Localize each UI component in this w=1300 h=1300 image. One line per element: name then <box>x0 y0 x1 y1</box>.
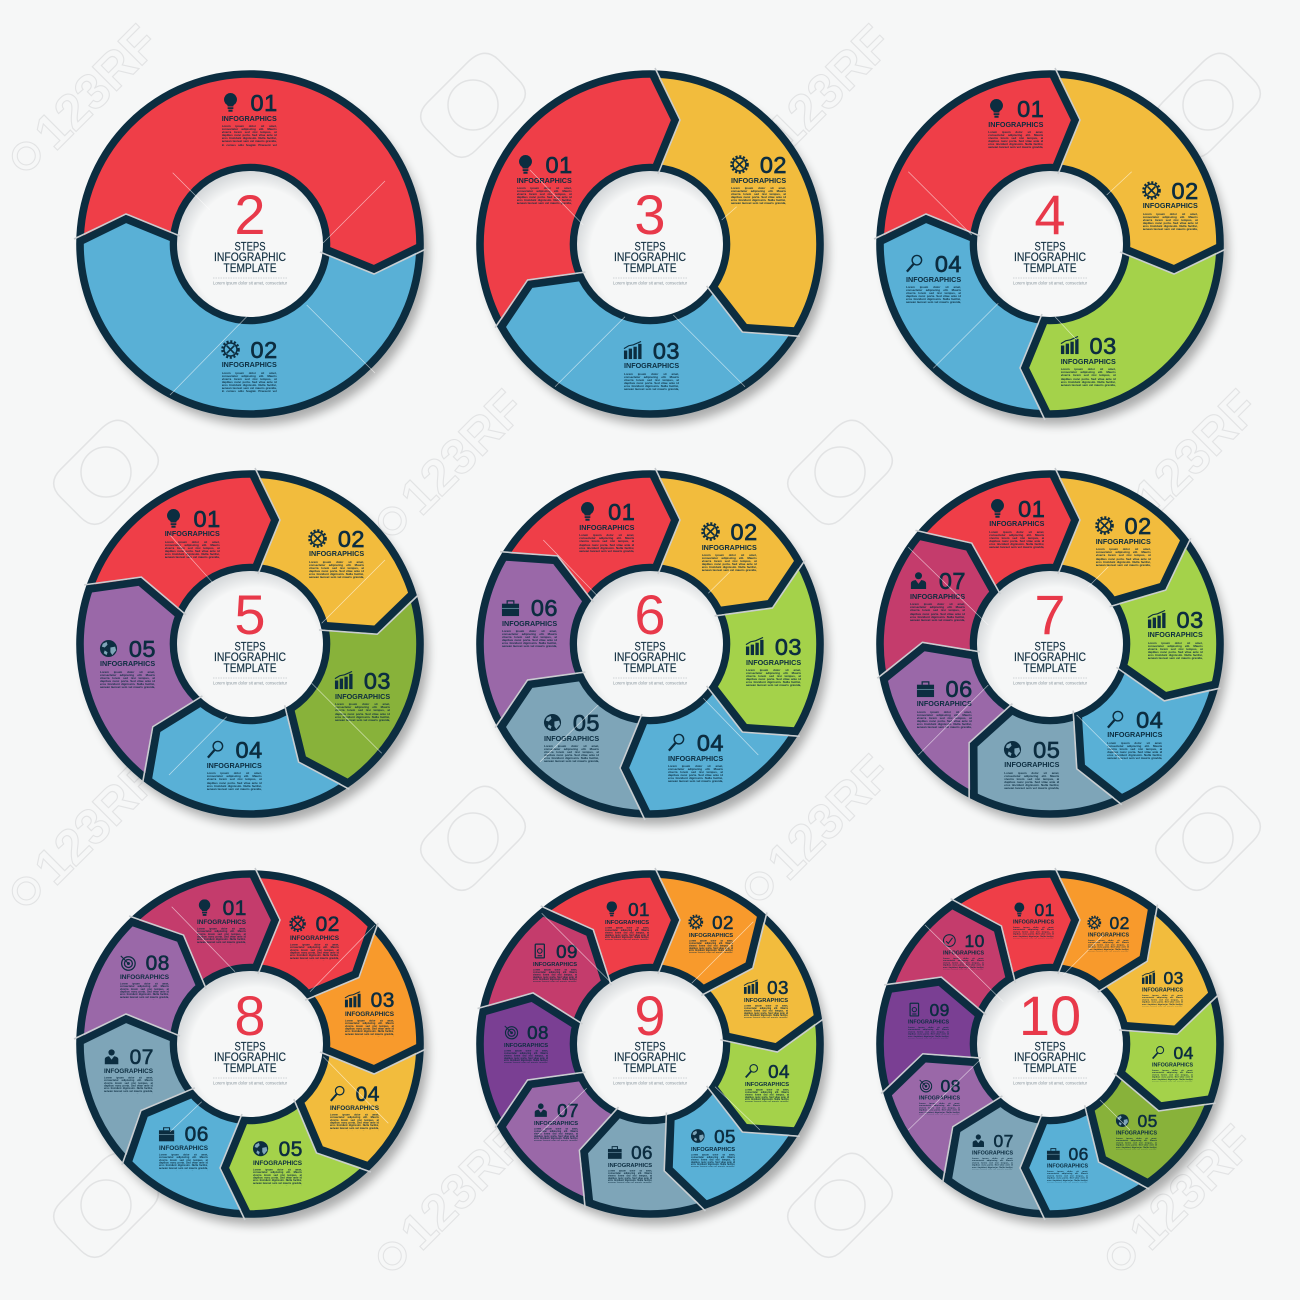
step 01 label: INFOGRAPHICS <box>988 120 1043 128</box>
step 03 label: 03 <box>653 338 680 364</box>
step 08 label: 08 <box>527 1022 549 1042</box>
step 04 label: 04 <box>1136 707 1163 733</box>
center label: TEMPLATE <box>1024 260 1077 274</box>
step 02 label: 02 <box>316 912 340 935</box>
step 10 label <box>943 935 984 974</box>
step 08 label: INFOGRAPHICS <box>120 972 169 980</box>
segment 04 <box>1104 970 1242 1120</box>
step 03 label: 03 <box>1177 607 1204 633</box>
segment 05 <box>38 567 230 788</box>
segment 01 <box>480 73 674 328</box>
segment 02 <box>606 844 778 1013</box>
center label <box>1013 182 1088 285</box>
step 01 label <box>989 496 1045 549</box>
step 04 label: INFOGRAPHICS <box>906 274 961 284</box>
step 03 label <box>334 668 391 722</box>
center label: STEPS <box>1034 1040 1066 1054</box>
segment 06 <box>568 1094 730 1241</box>
step 06 label: 06 <box>185 1122 209 1145</box>
step 08 label <box>919 1080 960 1119</box>
segment 02 <box>79 218 420 413</box>
step 02 label: 02 <box>731 519 758 545</box>
center label: STEPS <box>234 639 265 653</box>
step 01 label <box>222 90 278 147</box>
center label: 3 <box>634 182 665 246</box>
step 01 label: 01 <box>251 90 278 116</box>
step 05 label <box>544 710 600 764</box>
center label: Lorem ipsum dolor sit amet, consectetur <box>1013 680 1088 685</box>
step 01 label: INFOGRAPHICS <box>197 917 246 925</box>
step 07 label: 07 <box>557 1100 578 1121</box>
step 04 label: 04 <box>768 1061 789 1082</box>
segment 03 <box>1025 244 1220 414</box>
step 03 label <box>344 989 395 1037</box>
step 04 label <box>668 730 724 784</box>
step 02 label: INFOGRAPHICS <box>1143 201 1198 210</box>
step 07 label <box>104 1050 153 1096</box>
step 03 label <box>1142 972 1183 1010</box>
segment 04 <box>1050 633 1243 808</box>
center label <box>612 582 687 685</box>
segment 01 <box>880 73 1075 242</box>
step 03 label: 03 <box>1090 333 1117 359</box>
center label: Lorem ipsum dolor sit amet, consectetur <box>212 1080 287 1086</box>
center label: Lorem ipsum dolor sit amet, consectetur <box>1013 280 1088 285</box>
segment 01 <box>79 74 420 268</box>
step 02 label: INFOGRAPHICS <box>702 542 757 552</box>
step 02 label <box>308 526 365 579</box>
segment 06 <box>1025 1109 1149 1214</box>
segment 01 <box>88 473 274 615</box>
step 10 label: 10 <box>964 931 984 951</box>
step 03 label: 03 <box>1163 968 1183 987</box>
step 05 label: 05 <box>573 710 600 736</box>
step 05 label: INFOGRAPHICS <box>691 1145 735 1152</box>
step 08 label <box>504 1026 548 1067</box>
center label: INFOGRAPHIC <box>214 250 286 264</box>
center label: Lorem ipsum dolor sit amet, consectetur <box>612 680 687 685</box>
step 03 label <box>746 634 802 688</box>
step 01 label: INFOGRAPHICS <box>1013 918 1054 924</box>
segment 03 <box>246 572 480 796</box>
center label: STEPS <box>234 239 265 253</box>
step 04 label: 04 <box>697 730 724 756</box>
center label: STEPS <box>634 1040 665 1054</box>
step 08 label: 08 <box>941 1076 961 1096</box>
center label: TEMPLATE <box>1024 660 1077 674</box>
segment 01 <box>951 874 1075 979</box>
step 01 label: 01 <box>1035 900 1055 920</box>
step 01 label: 01 <box>608 499 635 525</box>
step 07 label: INFOGRAPHICS <box>534 1119 578 1126</box>
step 05 label <box>100 636 156 689</box>
segment 05 <box>490 643 686 856</box>
step 01 label <box>579 499 635 553</box>
step 02 label: 02 <box>251 337 278 363</box>
step 08 label <box>120 956 169 1002</box>
segment 09 <box>457 898 629 1066</box>
step 03 label <box>1060 333 1117 387</box>
segment 02 <box>1008 848 1170 1006</box>
segment 02 <box>1051 74 1220 268</box>
step 04 label: INFOGRAPHICS <box>745 1080 789 1087</box>
segment 03 <box>490 180 807 476</box>
step 07 label: INFOGRAPHICS <box>972 1149 1013 1155</box>
step 02 label: 02 <box>338 526 365 552</box>
center label: INFOGRAPHIC <box>614 250 686 264</box>
segment 04 <box>273 1000 454 1182</box>
step 05 label <box>691 1130 735 1172</box>
center label: INFOGRAPHIC <box>614 650 686 664</box>
step 01 label <box>988 96 1044 150</box>
step 02 label: INFOGRAPHICS <box>731 176 786 184</box>
panel: 3 steps chart <box>476 68 834 430</box>
center label: INFOGRAPHIC <box>214 650 286 664</box>
segment 09 <box>858 968 996 1118</box>
segment 02 <box>564 54 882 350</box>
step 07 label: INFOGRAPHICS <box>910 592 965 601</box>
step 06 label <box>608 1146 652 1188</box>
segment 08 <box>45 906 226 1088</box>
step 01 label <box>517 152 573 206</box>
step 05 label: 05 <box>1033 737 1060 763</box>
step 07 label: INFOGRAPHICS <box>104 1066 153 1074</box>
segment 02 <box>1008 434 1199 631</box>
step 05 label: INFOGRAPHICS <box>253 1158 302 1166</box>
step 06 label: INFOGRAPHICS <box>502 618 557 628</box>
segment 05 <box>1068 1038 1230 1196</box>
step 04 label: INFOGRAPHICS <box>1152 1061 1193 1068</box>
panel: 5 steps chart <box>76 468 434 830</box>
step 02 label <box>289 912 340 961</box>
step 09 label <box>908 1004 949 1043</box>
center label: STEPS <box>634 639 665 653</box>
step 02 label <box>221 337 278 393</box>
center label: STEPS <box>634 239 665 253</box>
step 03 label: INFOGRAPHICS <box>1148 630 1203 639</box>
step 01 label: INFOGRAPHICS <box>222 114 277 122</box>
step 02 label <box>1095 513 1152 567</box>
step 01 label <box>165 506 221 559</box>
step 02 label <box>1088 917 1129 955</box>
segment 02 <box>613 431 809 644</box>
step 03 label: 03 <box>767 977 789 997</box>
panel: 8 steps chart <box>74 868 434 1230</box>
segment 02 <box>206 839 387 1021</box>
step 04 label <box>330 1082 380 1131</box>
center label: TEMPLATE <box>623 1061 676 1075</box>
step 06 label: 06 <box>631 1142 652 1163</box>
step 03 label <box>624 338 680 391</box>
segment 07 <box>930 1082 1092 1240</box>
step 02 label: 02 <box>1125 513 1152 539</box>
center label: TEMPLATE <box>1024 1061 1077 1075</box>
segment 04 <box>624 686 796 814</box>
segment 04 <box>691 981 851 1151</box>
step 05 label <box>1004 737 1060 790</box>
segment 10 <box>870 892 1032 1050</box>
step 06 label <box>158 1122 209 1171</box>
step 04 label: INFOGRAPHICS <box>207 761 262 770</box>
center label: Lorem ipsum dolor sit amet, consectetur <box>212 280 287 285</box>
step 07 label <box>910 568 966 622</box>
center label: STEPS <box>1034 639 1066 653</box>
step 01 label: INFOGRAPHICS <box>605 917 649 925</box>
step 09 label <box>533 945 577 987</box>
center label: TEMPLATE <box>223 260 276 274</box>
step 01 label: 01 <box>546 152 573 178</box>
step 02 label <box>689 916 733 958</box>
step 04 label: INFOGRAPHICS <box>330 1103 379 1111</box>
segment 03 <box>1095 526 1245 706</box>
center label <box>612 984 687 1086</box>
panel: 7 steps chart <box>876 468 1234 830</box>
center label: STEPS <box>1034 239 1066 253</box>
step 07 label <box>972 1135 1013 1174</box>
step 03 label: INFOGRAPHICS <box>335 692 390 701</box>
step 09 label: 09 <box>556 941 577 962</box>
step 02 label <box>1142 178 1199 231</box>
step 03 label: 03 <box>364 668 391 694</box>
segment 05 <box>954 679 1147 854</box>
segment 06 <box>879 631 1029 810</box>
step 04 label <box>207 737 263 791</box>
step 01 label: 01 <box>222 896 247 919</box>
center label: 9 <box>634 984 665 1047</box>
segment 03 <box>692 908 821 1058</box>
step 02 label: 02 <box>1110 913 1130 932</box>
step 02 label: INFOGRAPHICS <box>1088 930 1129 937</box>
segment 04 <box>880 218 1049 414</box>
step 04 label: INFOGRAPHICS <box>1107 730 1162 739</box>
step 09 label: INFOGRAPHICS <box>908 1018 949 1024</box>
step 05 label: INFOGRAPHICS <box>1116 1129 1157 1135</box>
step 07 label: 07 <box>130 1046 154 1069</box>
step 02 label: INFOGRAPHICS <box>222 360 277 369</box>
segment 04 <box>129 652 363 876</box>
segment 01 <box>918 473 1075 592</box>
step 07 label: 07 <box>939 568 966 594</box>
step 06 label <box>916 676 973 729</box>
step 07 label: 07 <box>994 1131 1014 1151</box>
step 01 label: 01 <box>1018 496 1045 522</box>
step 04 label: 04 <box>935 251 962 277</box>
center label: TEMPLATE <box>223 660 276 674</box>
step 01 label: INFOGRAPHICS <box>989 519 1044 528</box>
center label: TEMPLATE <box>223 1061 276 1075</box>
step 05 label: 05 <box>714 1126 735 1147</box>
step 02 label: 02 <box>712 912 733 933</box>
step 04 label: 04 <box>236 737 263 763</box>
step 03 label: 03 <box>371 989 395 1012</box>
segment 02 <box>227 437 419 659</box>
step 06 label: 06 <box>1069 1145 1089 1164</box>
step 02 label: INFOGRAPHICS <box>290 933 339 941</box>
segment 06 <box>112 1067 293 1249</box>
center label <box>212 182 287 285</box>
step 04 label <box>745 1065 789 1107</box>
step 06 label: INFOGRAPHICS <box>917 699 972 708</box>
step 05 label <box>252 1137 303 1186</box>
step 04 label: INFOGRAPHICS <box>668 754 723 762</box>
step 08 label: INFOGRAPHICS <box>504 1040 548 1048</box>
step 05 label: INFOGRAPHICS <box>544 734 599 742</box>
step 06 label: INFOGRAPHICS <box>608 1161 652 1168</box>
segment 06 <box>429 537 625 749</box>
step 10 label: INFOGRAPHICS <box>943 949 984 955</box>
step 03 label: INFOGRAPHICS <box>1142 985 1183 992</box>
step 03 label: INFOGRAPHICS <box>744 995 788 1003</box>
segment 08 <box>463 990 593 1140</box>
segment 03 <box>1081 897 1219 1048</box>
panel: 4 steps chart <box>874 68 1234 430</box>
step 02 label: 02 <box>760 152 787 178</box>
step 02 label: INFOGRAPHICS <box>1096 537 1151 546</box>
step 03 label: INFOGRAPHICS <box>345 1010 394 1018</box>
step 04 label <box>906 251 962 305</box>
step 03 label <box>744 981 788 1022</box>
step 05 label: 05 <box>278 1137 303 1160</box>
center label: 4 <box>1034 182 1066 246</box>
step 06 label: 06 <box>946 676 973 702</box>
center label: TEMPLATE <box>623 260 676 274</box>
step 06 label <box>1047 1148 1088 1187</box>
step 04 label: 04 <box>1174 1044 1194 1063</box>
step 06 label: 06 <box>531 595 558 621</box>
step 05 label: INFOGRAPHICS <box>1004 760 1059 769</box>
segment 01 <box>541 874 674 982</box>
step 07 label <box>534 1104 578 1146</box>
step 06 label: INFOGRAPHICS <box>1047 1162 1088 1169</box>
step 05 label: 05 <box>129 636 156 662</box>
segment 03 <box>307 924 420 1069</box>
step 01 label: INFOGRAPHICS <box>517 176 572 184</box>
center label: INFOGRAPHIC <box>1014 250 1086 264</box>
step 01 label: 01 <box>1017 96 1044 122</box>
segment 07 <box>79 1019 192 1164</box>
center label: INFOGRAPHIC <box>614 1050 686 1064</box>
segment 07 <box>490 1053 650 1223</box>
step 02 label <box>730 152 787 206</box>
center label <box>212 984 287 1086</box>
step 01 label: INFOGRAPHICS <box>165 529 220 538</box>
center label <box>212 582 287 685</box>
center label: STEPS <box>234 1040 265 1054</box>
step 06 label <box>502 595 558 649</box>
segment 03 <box>674 538 870 750</box>
center label: 6 <box>634 582 665 646</box>
center label: Lorem ipsum dolor sit amet, consectetur <box>212 680 287 685</box>
step 03 label: INFOGRAPHICS <box>624 361 679 370</box>
step 05 label: 05 <box>1138 1111 1158 1131</box>
step 04 label <box>1107 707 1163 760</box>
segment 08 <box>881 1040 1019 1191</box>
center label: INFOGRAPHIC <box>1014 650 1086 664</box>
center label: Lorem ipsum dolor sit amet, consectetur <box>612 1080 687 1086</box>
center label: Lorem ipsum dolor sit amet, consectetur <box>612 280 687 285</box>
center label: TEMPLATE <box>623 660 676 674</box>
step 08 label: INFOGRAPHICS <box>919 1094 960 1100</box>
step 03 label: INFOGRAPHICS <box>1061 357 1116 366</box>
step 02 label: INFOGRAPHICS <box>689 931 733 938</box>
center label: 7 <box>1034 582 1066 646</box>
step 01 label <box>197 896 247 945</box>
segment 07 <box>835 518 1025 715</box>
step 02 label <box>701 519 758 573</box>
panel: 6 steps chart <box>476 468 834 830</box>
step 05 label <box>1116 1115 1157 1154</box>
step 02 label: 02 <box>1172 178 1199 204</box>
step 01 label: INFOGRAPHICS <box>579 523 634 532</box>
center label <box>1013 582 1088 685</box>
step 01 label: 01 <box>194 506 221 532</box>
panel: 10 steps chart <box>870 864 1230 1224</box>
step 01 label: 01 <box>628 899 650 919</box>
center label: INFOGRAPHIC <box>214 1050 286 1064</box>
step 09 label: INFOGRAPHICS <box>533 960 577 967</box>
center label <box>612 182 687 285</box>
panel: 2 steps chart <box>74 70 434 430</box>
step 03 label: 03 <box>775 634 802 660</box>
step 05 label: INFOGRAPHICS <box>100 659 155 668</box>
center label: Lorem ipsum dolor sit amet, consectetur <box>1013 1080 1088 1086</box>
step 01 label <box>605 903 649 944</box>
step 09 label: 09 <box>930 1000 950 1020</box>
step 04 label <box>1152 1047 1193 1086</box>
center label: 5 <box>234 582 265 646</box>
segment 05 <box>224 1102 369 1214</box>
step 08 label: 08 <box>146 952 170 975</box>
center label: INFOGRAPHIC <box>1014 1050 1086 1064</box>
segment 01 <box>503 473 674 601</box>
step 04 label: 04 <box>355 1082 380 1105</box>
center label: 10 <box>1019 984 1081 1047</box>
step 01 label <box>1013 904 1054 943</box>
center label <box>1013 984 1088 1086</box>
step 03 label <box>1148 607 1204 660</box>
segment 01 <box>130 874 274 986</box>
step 02 label: INFOGRAPHICS <box>309 549 364 558</box>
center label: 2 <box>234 182 265 246</box>
center label: 8 <box>234 984 265 1047</box>
panel: 9 steps chart <box>470 864 830 1224</box>
step 06 label: INFOGRAPHICS <box>159 1143 208 1151</box>
segment 05 <box>647 1065 810 1212</box>
step 03 label: INFOGRAPHICS <box>746 658 801 666</box>
